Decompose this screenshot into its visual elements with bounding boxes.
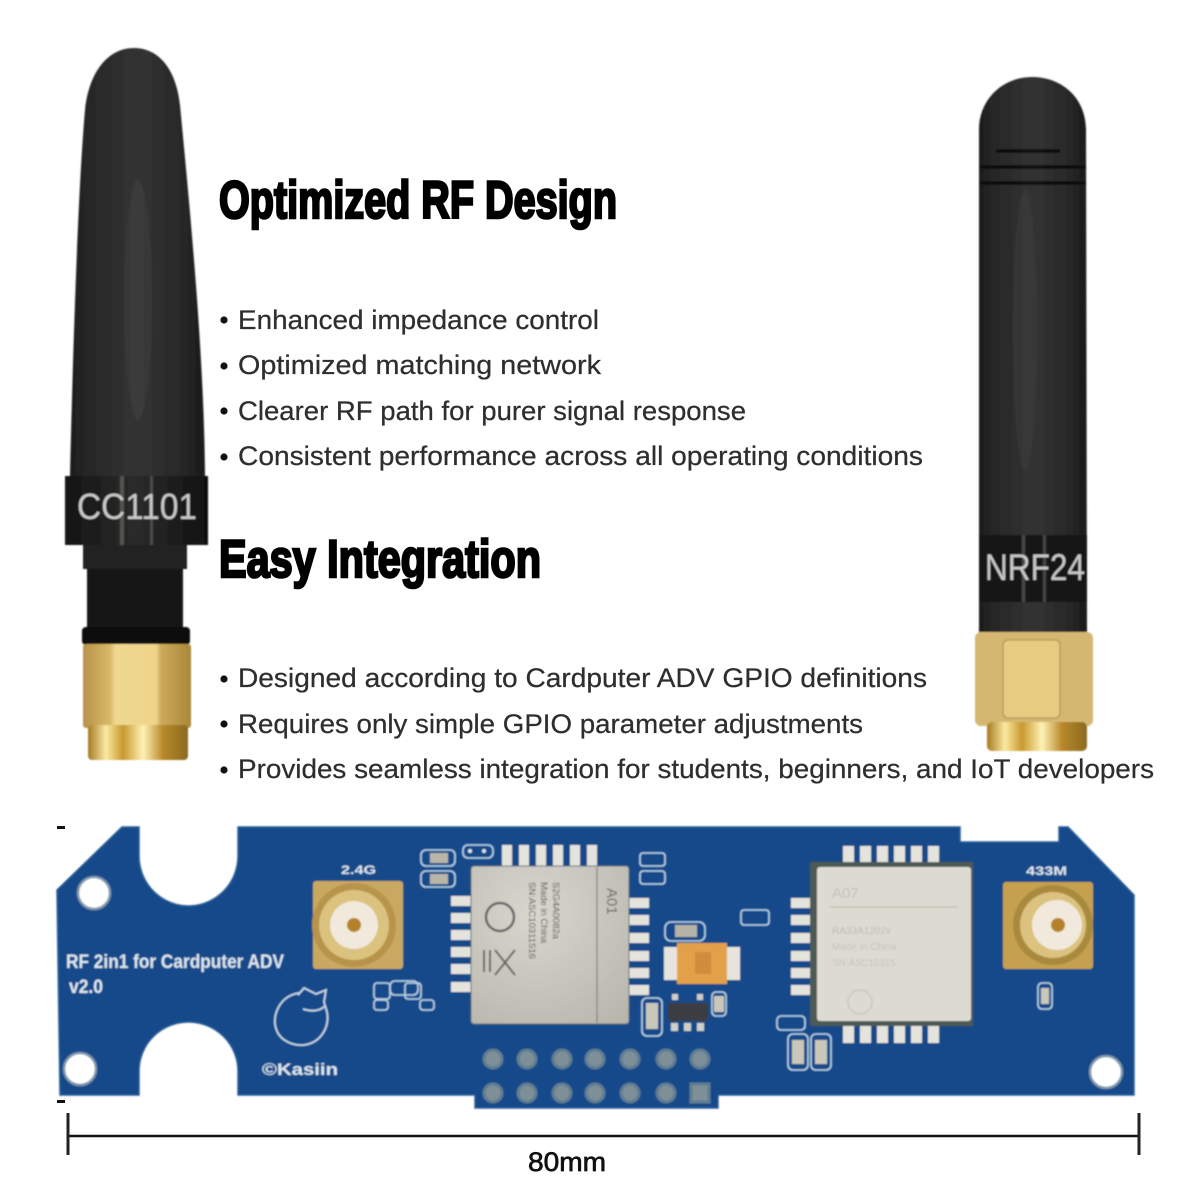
mounting holes [64,877,1122,1088]
SMA gold connector [83,644,191,760]
dimension line: 80mm: 80mm [528,1147,606,1177]
corner tick marks [57,826,65,1103]
2.4G SMA connector [312,881,403,969]
label collar: CC1101 [77,486,197,527]
antenna: NRF24 [975,77,1093,751]
module A01: A01 [603,888,620,915]
bullet 2: Requires only simple GPIO parameter adjustments [238,709,863,739]
2.4G label: 2.4G [341,863,376,877]
bullet 3: Provides seamless integration for students, beginners, and IoT developers [238,754,1154,784]
body highlight [1013,190,1037,470]
SMA gold connector [975,632,1093,751]
board title text: RF 2in1 for Cardputer ADV [66,952,284,973]
tantalum capacitor [664,943,740,984]
antenna body [979,77,1087,635]
body highlight [124,180,152,420]
module A07: SN:A5C10315 [832,958,896,969]
antenna stem [82,545,190,645]
PCB board [57,827,1134,1108]
bullet 1: Enhanced impedance control [238,305,599,335]
module A07: Made in China [832,942,897,953]
module A01: Made in China [538,882,549,944]
bullet 2: Optimized matching network [238,350,602,380]
board outline [57,827,1134,1108]
bullet 4: Consistent performance across all operating conditions [238,441,923,471]
433M SMA connector [1003,882,1093,969]
module A01 [471,866,629,1024]
logo: cat outline [275,988,328,1045]
label band: NRF24 [985,547,1085,588]
module A07 [810,862,973,1026]
module A01: S2G4A0082a [550,882,561,940]
list: RF design bullets [220,305,923,471]
heading: Optimized RF Design: Optimized RF Design [219,171,617,230]
module A01 pads [451,845,649,995]
label collar [65,476,208,545]
bullet 1: Designed according to Cardputer ADV GPIO definitions [238,663,927,693]
list: integration bullets [220,663,1154,784]
module A07: RA33A1202x [832,926,891,937]
body grooves [980,151,1086,183]
board title text: v2.0 [69,977,103,998]
antenna: CC1101 [65,48,208,760]
bullet 3: Clearer RF path for purer signal response [238,396,746,426]
small SMD components [374,845,1052,1070]
brand text: ©Kasiin [262,1060,338,1079]
module A01: SN:ASC10311516 [526,882,537,959]
433M label: 433M [1026,864,1067,878]
regulator chip [668,994,708,1031]
board title text [66,952,284,998]
label band [979,535,1087,602]
heading: Easy Integration: Easy Integration [219,530,541,589]
module A07 pads [791,846,939,1043]
antenna body [70,48,205,476]
GPIO header holes [484,1050,709,1102]
module A07: A07 [832,885,859,902]
